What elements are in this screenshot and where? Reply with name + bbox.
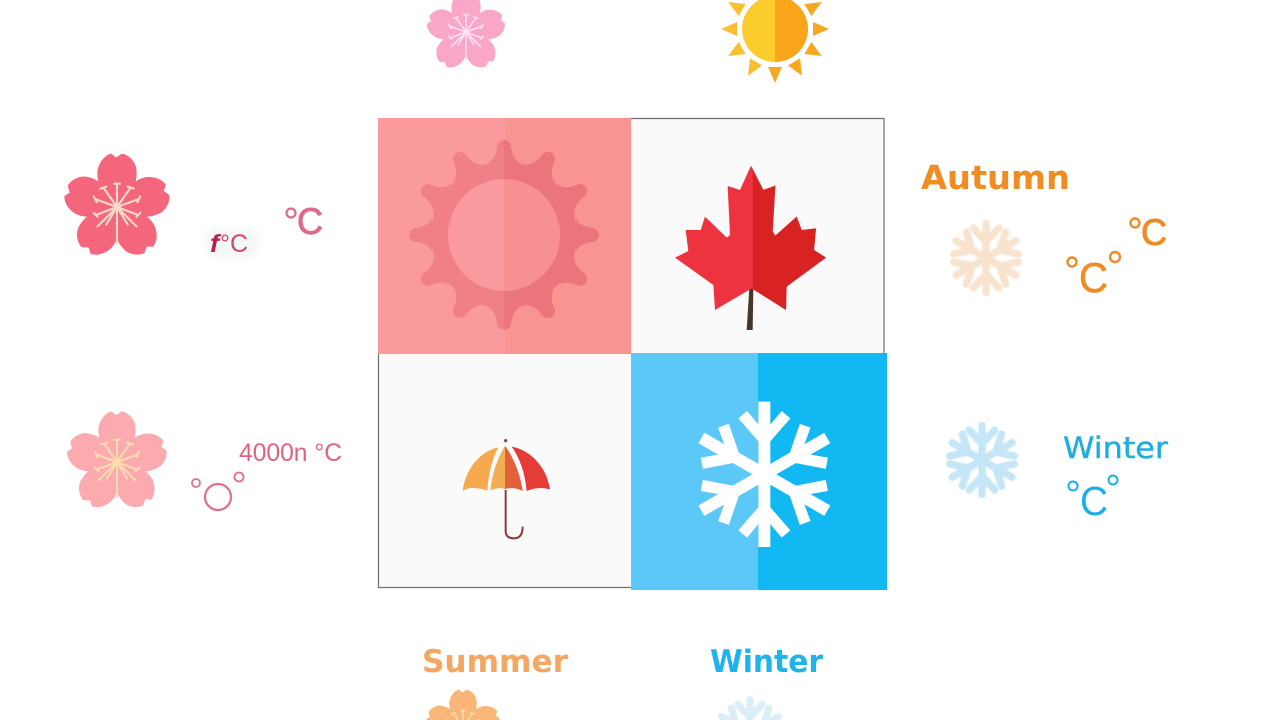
temperature label: autumn lower [1068,252,1120,301]
icon: pale blue snowflake bottom [715,700,785,720]
grid outline [378,118,884,588]
temperature label: pink degree: C [297,201,323,242]
temperature label: winter: C [1080,478,1108,524]
icon: light pink blossom [63,411,171,514]
icon: autumn peach snowflake [950,224,1022,292]
temperature marks: rings [192,472,244,510]
icon: top pink blossom [424,0,508,73]
heading: Winter right: Winter [1063,431,1168,465]
temperature label: pink degree [286,201,323,242]
temperature label: winter [1068,476,1118,524]
panel: summer sun cell [378,118,631,354]
heading: Autumn: Autumn [921,158,1070,197]
temperature label: small degree text: f [210,230,222,258]
temperature label: autumn upper [1130,212,1167,253]
temperature label: autumn upper: C [1141,212,1167,253]
heading: Summer: Summer [422,644,569,680]
temperature label: small degree text [205,228,259,258]
icon: winter blue snowflake [946,426,1018,494]
panel: autumn leaf cell [631,119,884,354]
icon: top sun [721,0,829,83]
panel: winter snowflake cell [631,353,887,590]
icon: red-pink blossom [60,154,174,262]
panel: umbrella cell [379,354,631,588]
icon: orange blossom [423,690,503,720]
temperature label: small degree text: °C [220,230,248,258]
heading: Winter bottom: Winter [710,644,824,680]
temperature label: 4000n: 4000n °C [239,439,342,467]
temperature label: autumn lower: C [1079,254,1108,301]
panel: four-season grid [378,118,887,590]
